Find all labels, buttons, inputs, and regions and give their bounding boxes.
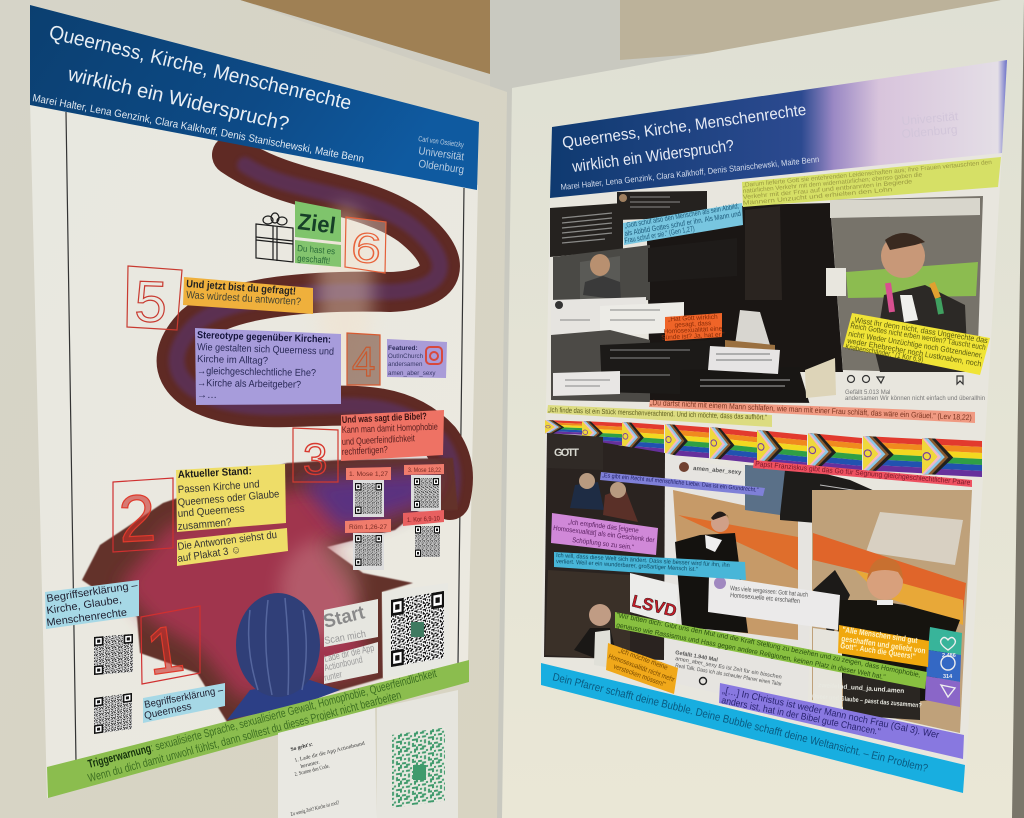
quote: Gott schuf also den Menschen [623,201,743,245]
banner: Dein Pfarrer schafft deine Bubble: Dein Pfarrer schafft deine Bubble. Deine Bubble schafft deine Weltansicht. – Ein Problem? [551,671,929,775]
callout: Begriffserklärung Kirche, Glaube, Menschenrechte: Menschenrechte [46,606,128,629]
text block: Lade dir die App: Actionbound [323,654,364,674]
quote: Alle Menschen: Gott". Auch die Queers!" [840,641,916,661]
text block: Und was sagt die Bibel: und Queerfeindlichkeit [342,433,415,448]
quote: Ich möchte meine Homosexualität: „Ich möchte meine [617,647,669,672]
icon: gift [256,213,293,262]
header: right poster title band: Queerness, Kirche, Menschenrechte [561,102,807,152]
instagram footer: andersamen Wir können nicht einfach und überallhin [845,396,985,402]
step 3 number box [293,428,338,484]
header: left poster title band: Queerness, Kirche, Menschenrechte [47,21,354,115]
papal coat of arms [805,358,836,398]
sheet: green QR code [377,690,458,818]
QR code: Begriffserklärung 2 [94,693,132,734]
quote: Alle Menschen: "Alle Menschen sind gut [842,625,918,645]
frame lines [66,112,464,762]
instruction sheet: So geht's: Zu wenig Zeit? Kirche ist cool? [290,800,340,818]
photo: pastor in rainbow stole: zweifelnd_und_ja.und.amen [818,682,904,695]
photo: pastor with rainbow flag [673,490,798,640]
header: right poster title band: wirklich ein Widerspruch? [570,138,735,176]
quote: In Christus: „[…] In Christus ist weder Mann noch Frau (Gal 3). Wer [721,685,940,741]
callout: Begriffserklärung Queerness [143,683,225,723]
text block: Die Antworten [177,528,288,566]
step 2 number box: 2 [117,480,157,556]
quote: Darum lieferte Gott: Verkehr mit der Frau auf und entbrannten in Begierde [743,178,913,201]
text block: Start Scan mich: Start [321,602,368,633]
text block: Start Scan mich [321,599,378,647]
text block: Stereotype gegenüber Kirchen [195,328,341,405]
dark comment card 5 [680,367,800,402]
text block: Aktueller Stand: und Queerness [177,503,245,520]
text block: Lade dir die App: runter [323,669,343,684]
QR group: Bible references: Röm 1,26-27 [349,524,387,531]
callout: Begriffserklärung Queerness: Begriffserklärung – [143,685,225,711]
Instagram lower caption: Gefällt 1.940 Mal [675,650,719,664]
photo: dark lower corridor [551,330,650,402]
callout: Featured accounts with Instagram icon: amen_aber_sexy [388,370,436,377]
text block: Du hast es geschafft: geschafft! [297,253,331,266]
photo: man in corridor [553,245,650,302]
banner: Triggerwarnung: Wenn du dich damit unwohl fühlst, dann solltest du dieses Projekt nicht bearbeiten [87,689,403,785]
dark church photo [647,203,843,403]
Instagram white post [662,453,812,715]
quote: Darum lieferte Gott: natürlichen Verkehr mit dem widernatürlichen; ebenso gaben die [743,171,923,195]
dark comment card 2 [617,191,707,220]
text block: Stereotype gegenüber Kirchen: Wie gestalten sich Queerness und [197,342,334,358]
banner: Triggerwarnung: Triggerwarnung: sexualisierte Sprache, sexualisierte Gewalt, Homophobie, Queerfeindlichkeit [87,668,439,771]
quote: Ich will, dass diese Welt: verliert. Weil er ein wunderbarer, großartiger Mensch ist." [556,559,698,573]
photo: pastor in rainbow stole [812,490,972,733]
logo: washed-out Universität Oldenburg [901,109,959,141]
quote: Ich möchte meine Homosexualität: verstecken müssen!" [612,663,667,689]
step 2 number box [113,478,173,556]
callout: Begriffserklärung Kirche, Glaube, Menschenrechte: Kirche, Glaube, [46,594,123,617]
callout: Begriffserklärung Kirche, Glaube, Menschenrechte [45,579,139,629]
text block: Lade dir die App [323,642,378,684]
instruction sheet: So geht's: So geht's: [290,742,314,753]
quote: Hat Gott wirklich gesagt [661,313,725,342]
quote: Es gibt ein Recht: „Es gibt ein Recht auf menschliche Liebe. Das ist ein Grundrecht." [602,473,759,494]
white comment: Was viele vergessen: Homosexuelle etc erschaffen [730,592,800,605]
quote: In Christus: anders ist, hat in der Bibel gute Chancen." [720,695,881,738]
quote: Hat Gott wirklich gesagt: Sünde ist? Ja, hat er." [661,331,725,342]
quote: Alle Menschen: geschaffen und geliebt von [841,634,926,656]
text block: Und jetzt bist du gefragt [183,277,313,314]
dark comment card 1 [550,203,623,257]
instruction sheet: So geht's: herunter. [300,759,321,770]
panel: right poster [541,60,1007,793]
text block: Lade dir die App: Lade dir die App [323,643,375,665]
text block: Und was sagt die Bibel [341,410,444,461]
quote: Wisst ihr denn nicht: Knabenschänder." (1 Kor 6,9) [845,342,924,364]
text block: Und was sagt die Bibel: rechtfertigen? [342,445,388,458]
step 4 number box [347,333,380,385]
text block: Aktueller Stand: Queerness oder Glaube [177,488,280,509]
text block: Aktueller Stand: zusammen? [177,516,232,533]
quote: Darum lieferte Gott: „Darum lieferte Gott sie entehrenden Leidenschaften aus; ihre Frauen vertauschten den [743,159,993,189]
step 1 number box: 1 [142,610,188,689]
poster sheet [30,100,478,798]
quote: Ich empfinde [551,513,658,555]
QR code: Begriffserklärung 1 [94,634,133,675]
logo: Universität Oldenburg: Universität [418,145,465,163]
quote: Wir bitten dich: "Wir bitten dich: Gibt uns den Mut und die Kraft Stellung zu beziehen und zu zeigen, dass Homophobie, [616,612,921,679]
quote: Ich empfinde: Homosexualität] als ein Geschenk der [553,525,655,544]
text block: Die Antworten: Die Antworten siehst du [177,529,278,553]
TikTok side bar icons [925,627,962,707]
quote: Ich empfinde: Schöpfung so zu sein." [572,537,635,552]
header: right poster title band: Marei Halter, Lena Genzink, Clara Kalkhoff, Denis Stanischewski, Maite Benn [560,154,820,192]
account name: amen_aber_sexy [693,466,742,476]
instruction sheet: So geht's: 1. Lade dir die App Actionbound [294,741,366,764]
step 3 number box: 3 [303,435,327,484]
instagram footer: Gefällt 5.013 Mal [845,390,890,396]
light glare [317,205,373,375]
TikTok side bar icons: 314 [943,674,953,680]
quote: Hat Gott wirklich gesagt: gesagt, dass [674,320,712,329]
callout: Begriffserklärung Kirche, Glaube, Menschenrechte: Begriffserklärung – [46,579,139,605]
callout: Featured accounts with Instagram icon: andersamen [388,361,423,368]
quote: Darum lieferte Gott [742,157,1001,207]
text block: Und was sagt die Bibel: Kann man damit Homophobie [342,422,438,436]
quote: Papst Franziskus: Papst Franziskus gibt das Go für Segnung gleichgeschlechtlicher Paare [755,459,971,487]
text block: Stereotype gegenüber Kirchen: Kirche im Alltag? [197,354,269,367]
right display board [502,0,1024,818]
quote: Wisst ihr denn nicht [843,313,990,375]
quote: Gott schuf also den Menschen: Frau schuf er sie." (Gen 1,27) [624,224,696,245]
text block: Stereotype gegenüber Kirchen: Stereotype gegenüber Kirchen: [197,330,331,346]
dark comment top right [745,465,902,530]
text block: Aktueller Stand: Passen Kirche und [177,478,260,496]
white comment: Was viele vergessen [708,575,840,630]
account name [679,462,742,476]
dark comment card 4 [600,340,710,395]
callout: Featured accounts with Instagram icon: Featured: [388,345,418,352]
step 5 number box: 5 [134,269,168,335]
callout: Begriffserklärung Queerness: Queerness [143,701,193,722]
quote: Ich möchte meine Homosexualität [606,643,678,694]
quote: Hat Gott wirklich gesagt: „Hat Gott wirklich [668,314,718,323]
quote: Wisst ihr denn nicht: „Wisst ihr denn nicht, dass Ungerechte das [852,315,989,345]
Instagram lower caption: Real Talk. Dass ich als schwuler Pfarrer einen Talar [675,663,782,688]
instagram footer [800,358,985,412]
logo: Universität Oldenburg [418,134,465,176]
text block: Stereotype gegenüber Kirchen: →Kirche als Arbeitgeber? [197,378,302,391]
TikTok side bar icons: 2.486 [942,653,956,659]
quote: Ich möchte meine Homosexualität: Homosexualität nicht mehr [607,653,676,684]
header: left poster title band: Marei Halter, Lena Genzink, Clara Kalkhoff, Denis Stanischewski, Maite Benn [31,92,365,165]
text block: Du hast es geschafft [295,240,341,267]
icon: instagram [426,347,442,364]
quote: Wisst ihr denn nicht: nicht! Weder Unzüchtige noch Götzendiener, [848,329,983,360]
instruction sheet: So geht's [278,708,377,818]
text block: Stereotype gegenüber Kirchen: →… [197,390,217,401]
label: Ziel [295,201,341,242]
panel: left poster [30,5,479,818]
QR code: Actionbound start [382,583,450,678]
dark left photos: LSVD [630,591,679,621]
quote: Alle Menschen [838,625,929,667]
Instagram lower caption [675,650,782,688]
QR group: Bible references: 1. Kor 6,9-10 [407,515,440,524]
text block: Und jetzt bist du gefragt: Was würdest du antworten? [186,289,301,308]
header: left poster title band [30,5,479,190]
dark left photos: GOTT [554,447,579,459]
Instagram lower caption: amen_aber_sexy Es ist Zeit für ein bisschen [675,656,782,681]
step 6 number box: 6 [349,223,383,273]
step 6 number box [345,217,386,273]
left display board [0,0,507,818]
quote: Ich will, dass diese Welt [554,552,746,580]
callout: Featured accounts with Instagram icon: OutInChurch [388,353,424,360]
figure: person seen from behind [227,593,340,720]
quote: Wisst ihr denn nicht: Reich Gottes nicht erben werden? Täuscht euch [850,321,986,352]
header: left poster title band: wirklich ein Widerspruch? [65,63,291,136]
quote: Wisst ihr denn nicht: weder Ehebrecher noch Lustknaben, noch [846,336,982,369]
quote: Gott schuf also den Menschen: als Abbild Gottes schuf er ihn. Als Mann und [624,209,742,238]
callout: Featured accounts with Instagram icon [387,339,447,378]
label: Ziel: Ziel [296,208,337,239]
dark comment card 3 [648,238,737,282]
text block: Start Scan mich: Scan mich [324,629,367,647]
dark left photos [544,433,679,668]
poster sheet [541,150,1002,770]
white comment card 2 [708,346,780,374]
logo: washed-out Universität Oldenburg: Universität [901,109,959,128]
step 5 number box [127,266,182,335]
instruction sheet: So geht's: 2. Scanne den Code. [294,763,331,778]
text block: Stereotype gegenüber Kirchen: →gleichgeschlechtliche Ehe? [197,366,317,379]
cardboard box [240,0,490,74]
quote: Ich finde das: „Ich finde das ist ein Stück menschenverachtend. Und ich möchte, dass das aufhört." [548,405,767,422]
QR group: Bible references: 1. Mose 1,27 [349,471,388,478]
white comment card 3 [553,371,620,396]
quote: Wir bitten dich: genauso wie Rassismus und Hass gegen andere Religionen, keinen Platz in dieser Welt hat." [616,622,886,681]
winding path illustration [82,155,458,722]
quote: Gott schuf also den Menschen: „Gott schuf also den Menschen als sein Abbild; [624,201,740,230]
collage: top social media collage [547,157,1001,427]
text block: Aktueller Stand: Aktueller Stand: [178,465,252,481]
text block: Und was sagt die Bibel: Und was sagt die Bibel? [342,411,427,426]
progress pride flag strip [545,420,982,477]
quote: Hat Gott wirklich gesagt: Homosexualität eine [663,325,723,336]
quote: Darum lieferte Gott: Männern Unzucht und erhielten den Lohn [743,186,893,207]
photo: person in clerical collar [826,196,983,374]
text block: Und jetzt bist du gefragt: Und jetzt bist du gefragt! [186,278,296,298]
photo: pastor in rainbow stole: Queer und Glaube – passt das zusammen? [812,693,922,710]
step 4 number box: 4 [352,338,375,385]
quote: Ich empfinde: „Ich empfinde das [eigene [568,519,639,535]
quote: Ich will, dass diese Welt: Ich will, dass diese Welt sich ändert. Dass sie besser wird für ihn, ihn [556,553,730,569]
text block: Die Antworten: auf Plakat 3 ☺ [177,544,242,565]
white comment: Was viele vergessen: Was viele vergessen: Gott hat auch [730,585,808,599]
white comment cards [551,297,684,336]
logo: Universität Oldenburg: Carl von Ossietzky [418,134,465,149]
logo: Universität Oldenburg: Oldenburg [418,158,465,176]
QR group: Bible references: 3. Mose 18,22 [408,467,441,474]
collage: lower social media collage [544,433,972,759]
text block: Du hast es geschafft: Du hast es [297,243,336,256]
LSVD logo [630,573,678,625]
text block: Aktueller Stand [176,464,286,533]
logo: washed-out Universität Oldenburg: Oldenburg [901,122,958,141]
QR group: Bible references [345,464,444,570]
header: right poster title band [550,60,1007,198]
quote: Du darfst nicht: „Du darfst nicht mit einem Mann schlafen, wie man mit einer Frau schläft, das wäre ein Gräuel." (Lev 18,22) [650,398,972,422]
